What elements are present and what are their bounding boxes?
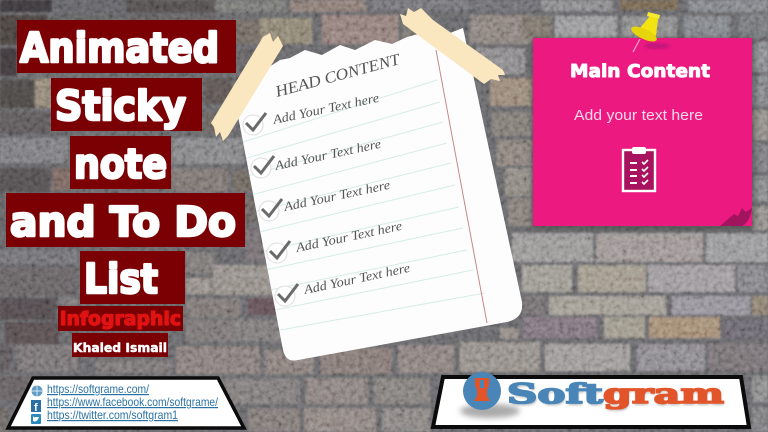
icon: clipboard checklist (623, 147, 655, 191)
logo text (507, 379, 725, 412)
list item 1 (243, 90, 381, 135)
title: Sticky: Sticky (55, 82, 186, 130)
icon: logo circle (463, 372, 501, 410)
list item 5: Add Your Text here (301, 260, 412, 297)
title: and To Do: and To Do (10, 198, 236, 246)
icon: facebook: f (34, 402, 38, 414)
heading: head content: HEAD CONTENT (273, 51, 403, 101)
panel: links (8, 378, 244, 428)
tape: right (400, 8, 505, 84)
link: twitter: https://twitter.com/softgram1 (47, 408, 178, 422)
logo shadow (460, 404, 520, 418)
panel: softgram logo (433, 372, 749, 427)
list item 4 (267, 218, 404, 263)
title: List: List (84, 255, 158, 303)
list item 1: Add Your Text here (270, 90, 381, 127)
subtitle: infographic: infographic (60, 308, 181, 330)
link: facebook: https://www.facebook.com/softgrame/ (47, 395, 219, 409)
panel: main content sticky note (531, 12, 756, 230)
icon: globe (32, 386, 42, 396)
list item 3: Add Your Text here (281, 177, 392, 214)
list item 2: Add Your Text here (272, 136, 383, 173)
list item 3 (259, 177, 392, 221)
note paper to-do list (233, 28, 522, 361)
title: note: note (74, 140, 167, 188)
author: Khaled Ismail: Khaled Ismail (73, 341, 167, 355)
link: website: https://softgrame.com/ (47, 382, 150, 396)
logo text: gram (603, 379, 724, 410)
author: Khaled Ismail (72, 333, 168, 357)
list item 2 (251, 136, 383, 178)
icon: twitter (31, 414, 41, 424)
list item 5 (275, 260, 412, 306)
margin line (436, 50, 487, 323)
text: add your text here: Add your text here (574, 107, 703, 124)
list item 4: Add Your Text here (293, 218, 404, 255)
logo text: Softgram (509, 381, 725, 412)
icon: yellow push pin (629, 12, 670, 52)
logo text: Soft (507, 379, 604, 410)
title: Animated: Animated (20, 24, 219, 72)
page curl (720, 208, 752, 226)
tape: left (211, 33, 283, 141)
icon: facebook (31, 400, 41, 414)
heading: main content: Main Content (570, 61, 710, 82)
